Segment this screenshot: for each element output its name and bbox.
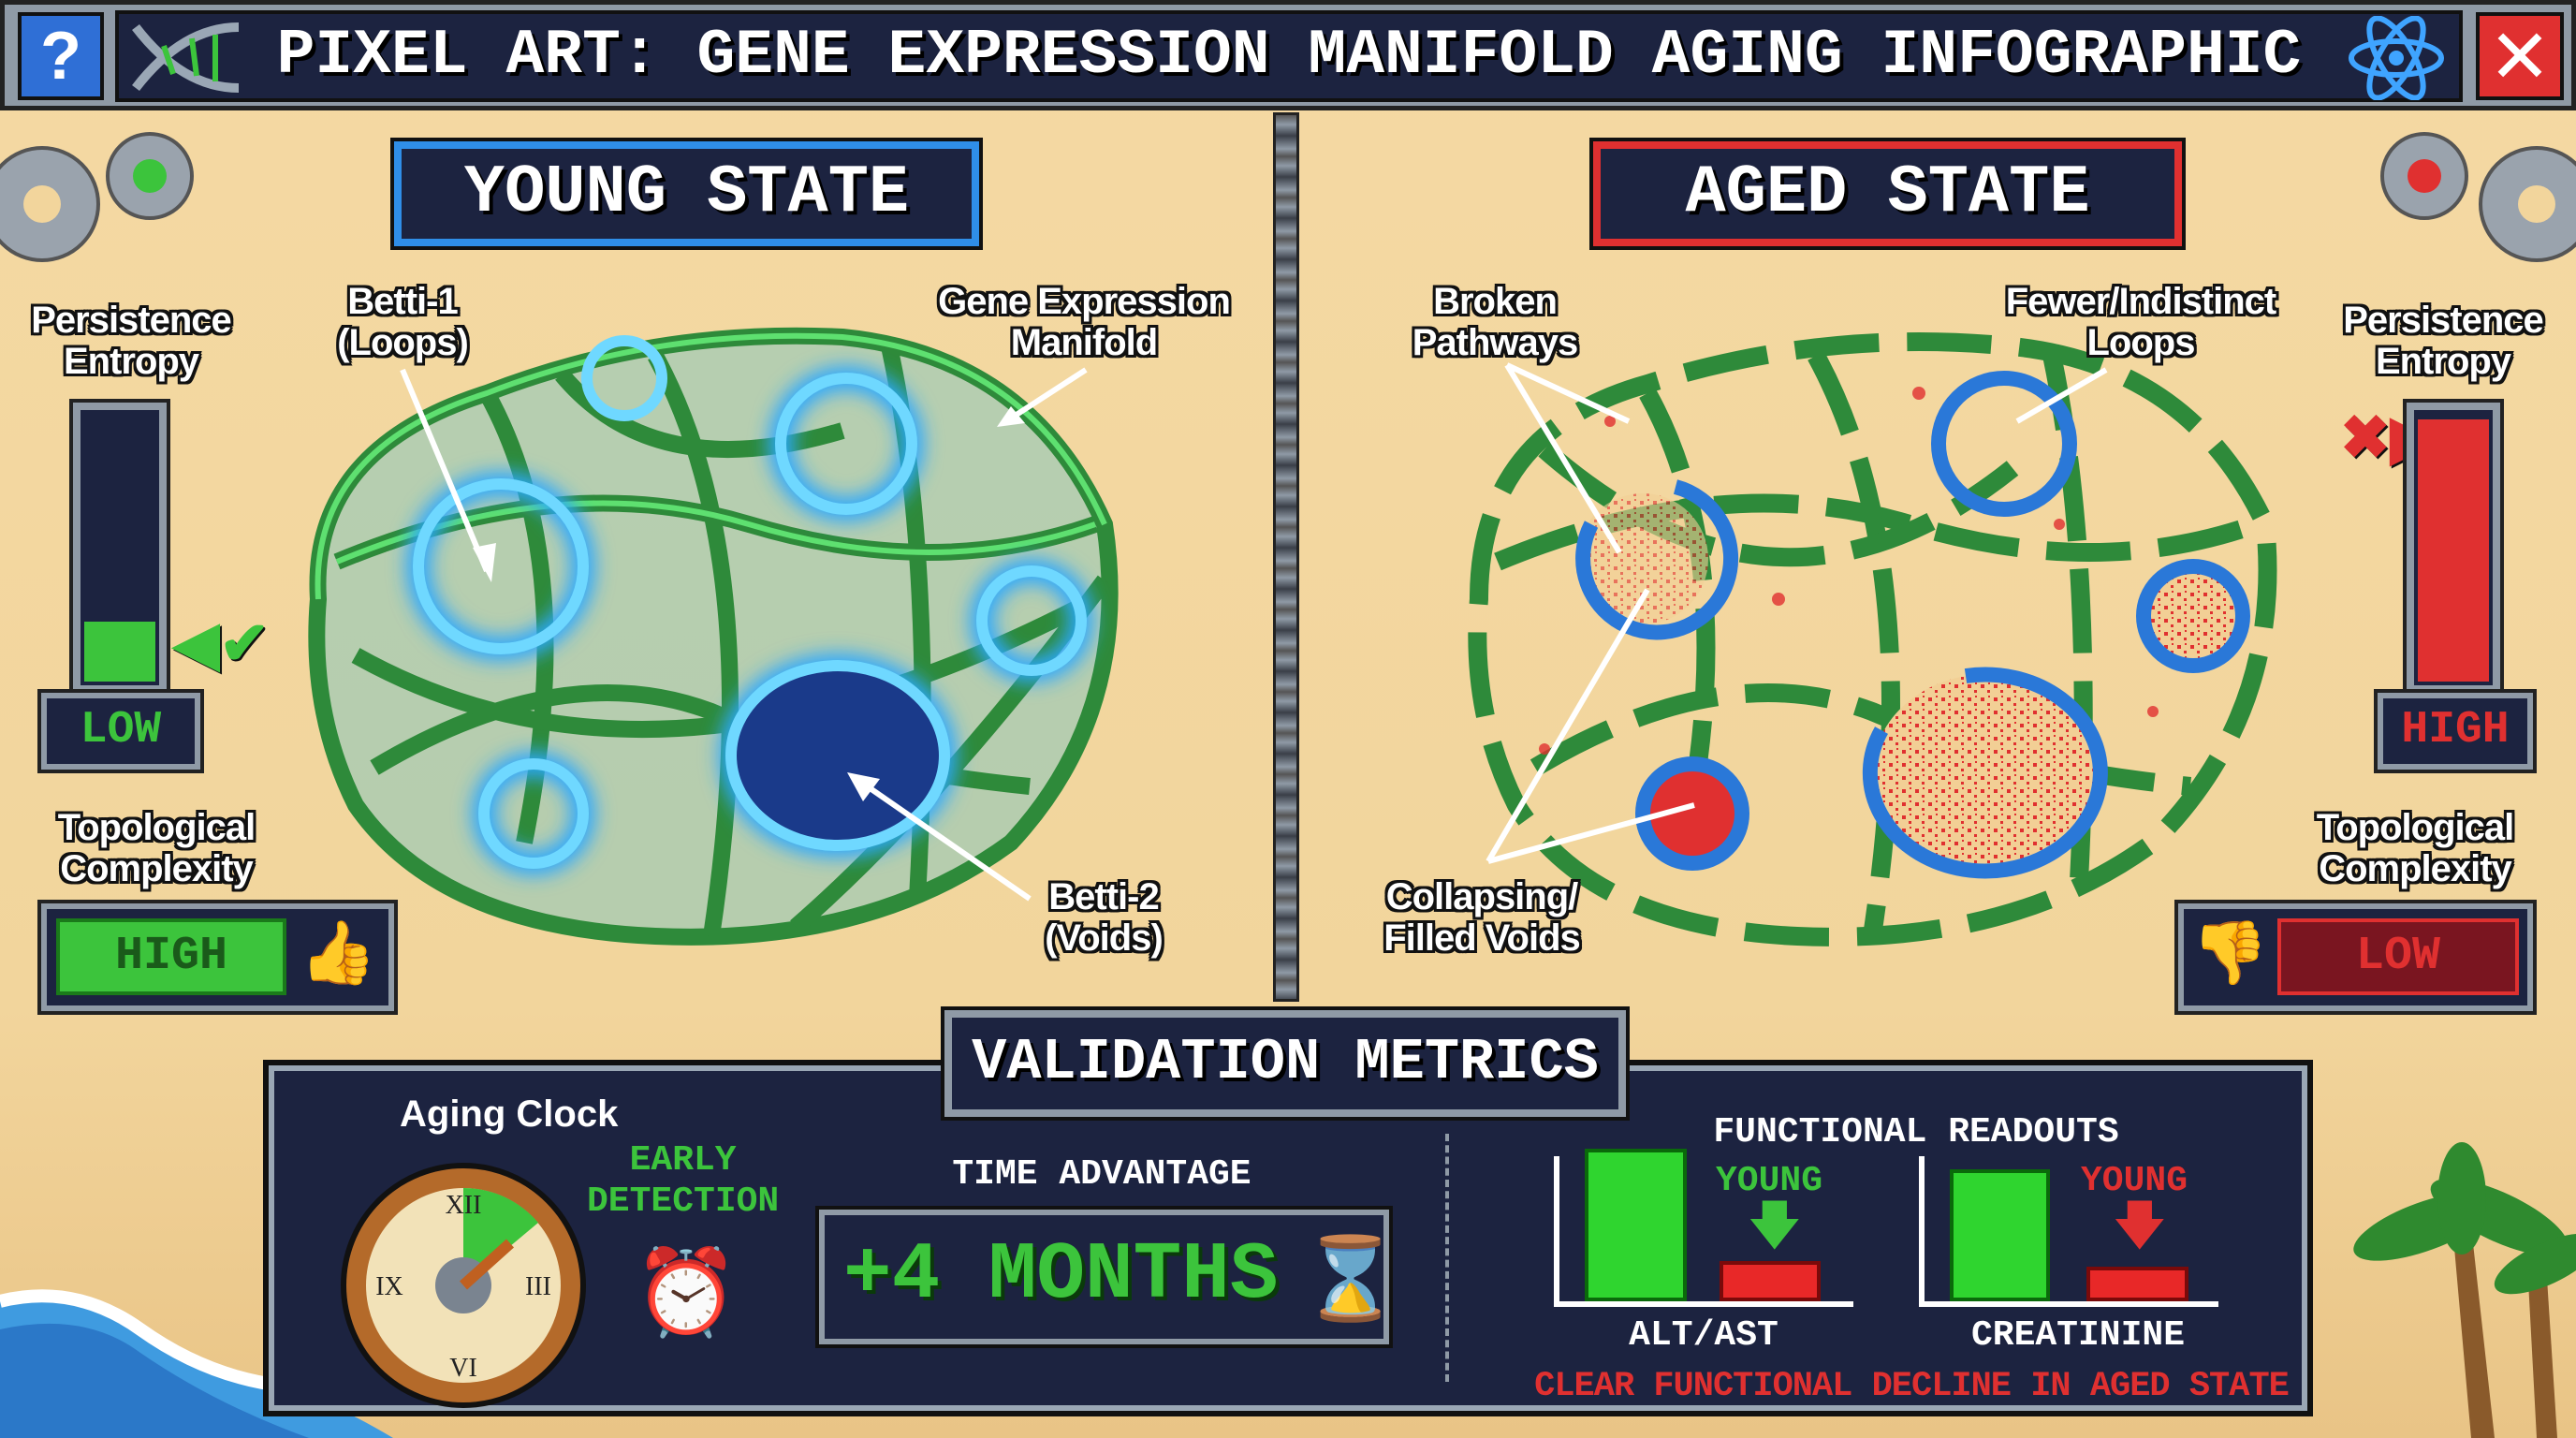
center chain divider <box>1273 112 1299 1002</box>
panel: young persistence entropy gauge <box>30 300 270 773</box>
icon: clock: XII <box>446 1191 481 1220</box>
heading: young state <box>394 141 979 246</box>
bar chart: creatinine <box>1919 1156 2218 1356</box>
bar chart: creatinine: YOUNG <box>2081 1161 2188 1201</box>
label: gene expression manifold: Gene Expression <box>938 281 1230 322</box>
early detection <box>587 1140 779 1222</box>
label: betti-2: Betti-2 <box>1048 876 1159 917</box>
label: betti-2 <box>1044 876 1164 961</box>
label: Complexity <box>2319 848 2511 889</box>
heading: aged state <box>1593 141 2182 246</box>
divider dotted <box>1445 1134 1449 1382</box>
icon: clock: VI <box>449 1354 477 1383</box>
icon: clock: IX <box>375 1272 403 1301</box>
heading: young state: YOUNG STATE <box>464 154 909 231</box>
label: collapsing voids: Filled Voids <box>1383 917 1580 959</box>
label: betti-1: (Loops) <box>337 322 468 363</box>
icon: clock <box>341 1163 586 1408</box>
title bar <box>0 0 2576 110</box>
bar chart: alt/ast: ALT/AST <box>1629 1315 1778 1356</box>
label: gene expression manifold: Manifold <box>1011 322 1157 363</box>
time advantage: +4 MONTHS <box>843 1229 1278 1321</box>
bar chart: creatinine: CREATININE <box>1971 1315 2185 1356</box>
high badge: HIGH <box>2401 705 2510 756</box>
heading: validation metrics <box>944 1010 1626 1117</box>
bar chart: alt/ast <box>1554 1149 1853 1356</box>
aging clock: Aging Clock <box>400 1093 618 1135</box>
label: betti-1 <box>336 281 470 365</box>
beach sea bottom-left <box>0 1289 393 1438</box>
label <box>55 807 256 891</box>
icon: clock: III <box>525 1272 551 1301</box>
panel: validation metrics <box>263 1060 2313 1416</box>
low badge: LOW <box>80 705 161 756</box>
bar chart: creatinine: 🡇 <box>2113 1196 2167 1255</box>
heading: validation metrics: VALIDATION METRICS <box>972 1029 1599 1095</box>
arrow: betti-2 <box>847 772 1032 901</box>
chart: functional readouts <box>1534 1112 2289 1406</box>
panel: aged persistence entropy gauge <box>2340 300 2546 773</box>
gears left <box>0 132 194 262</box>
time advantage <box>815 1154 1400 1348</box>
icon: dna <box>132 22 239 93</box>
early detection: EARLY <box>630 1140 737 1181</box>
panel: aged topological complexity <box>2174 807 2537 1015</box>
label: collapsing voids: Collapsing/ <box>1386 876 1577 917</box>
label: broken pathways: Broken <box>1433 281 1557 322</box>
help icon: ? <box>40 19 81 94</box>
palm trees bottom-right <box>2353 1142 2576 1438</box>
close icon <box>2476 12 2564 100</box>
icon: atom <box>2349 16 2444 100</box>
gauge tube <box>73 403 167 693</box>
label: broken pathways: Pathways <box>1412 322 1577 363</box>
icon: x marker: ✖▶ <box>2340 404 2437 471</box>
label: Entropy <box>64 341 198 382</box>
label: betti-2: (Voids) <box>1045 917 1163 959</box>
aging clock <box>341 1093 779 1408</box>
close icon: ✕ <box>2488 15 2552 98</box>
high badge <box>41 903 394 1011</box>
label: Persistence <box>2343 300 2543 341</box>
icon: alarm clock: ⏰ <box>634 1246 739 1340</box>
arrow: manifold <box>997 367 1088 427</box>
title: PIXEL ART: GENE EXPRESSION MANIFOLD AGING INFOGRAPHIC <box>277 20 2301 92</box>
help icon <box>18 12 104 100</box>
label <box>2314 807 2514 891</box>
low badge <box>2178 903 2533 1011</box>
high badge: HIGH <box>115 930 227 983</box>
label: Topological <box>58 807 255 848</box>
bar chart: alt/ast: 🡇 <box>1748 1196 1802 1255</box>
label: broken pathways <box>1412 281 1580 365</box>
arrow: fewer loops <box>2016 367 2108 423</box>
chart: young manifold <box>308 328 1119 946</box>
gears right <box>2380 132 2576 262</box>
icon: hourglass: ⌛ <box>1300 1234 1400 1324</box>
low badge <box>41 693 200 770</box>
heading: aged state: AGED STATE <box>1685 154 2090 231</box>
label: Topological <box>2317 807 2513 848</box>
label: gene expression manifold <box>936 281 1232 363</box>
label <box>2342 300 2546 384</box>
early detection: DETECTION <box>587 1181 779 1222</box>
arrow: broken pathways <box>1505 362 1631 554</box>
panel: young topological complexity <box>37 807 398 1015</box>
label: Persistence <box>31 300 231 341</box>
icon: thumbs up: 👍 <box>300 917 376 987</box>
low badge: LOW <box>2356 930 2440 983</box>
label: Entropy <box>2376 341 2510 382</box>
label: fewer loops: Fewer/Indistinct <box>2006 281 2276 322</box>
arrow: collapsing voids <box>1486 588 1695 864</box>
label: fewer loops <box>2005 281 2279 365</box>
caption: decline: CLEAR FUNCTIONAL DECLINE IN AGED STATE <box>1534 1367 2289 1406</box>
label: collapsing voids <box>1383 876 1582 959</box>
bar chart: alt/ast: YOUNG <box>1716 1161 1822 1201</box>
icon: check: ◀✔ <box>173 609 270 677</box>
gauge tube <box>2407 403 2500 693</box>
label: betti-1: Betti-1 <box>347 281 458 322</box>
arrow: betti-1 <box>400 369 496 582</box>
label <box>30 300 234 384</box>
title <box>115 10 2463 102</box>
chart: functional readouts: FUNCTIONAL READOUTS <box>1713 1112 2119 1152</box>
chart: aged manifold <box>1468 332 2276 946</box>
time advantage: TIME ADVANTAGE <box>952 1154 1251 1195</box>
high badge <box>2378 693 2533 770</box>
label: fewer loops: Loops <box>2087 322 2194 363</box>
label: Complexity <box>60 848 253 889</box>
icon: thumbs down: 👎 <box>2191 917 2268 987</box>
